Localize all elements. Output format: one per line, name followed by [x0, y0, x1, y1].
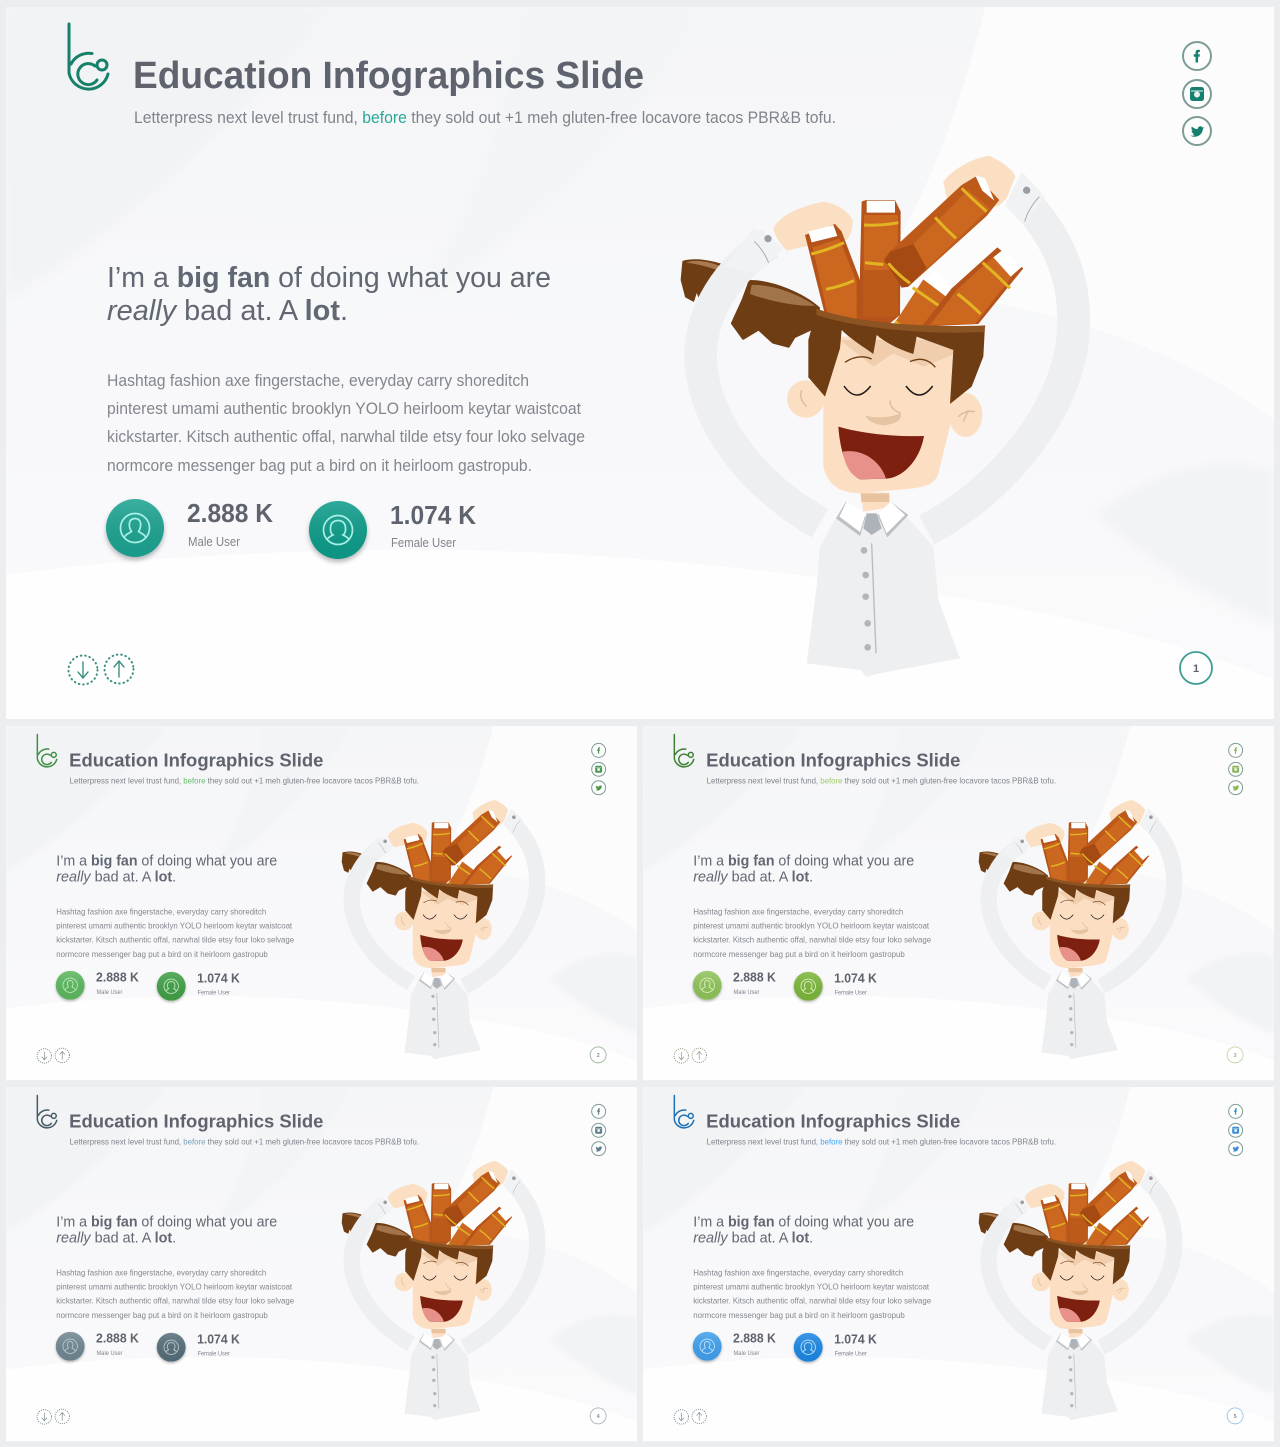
body text: Hashtag fashion axe fingerstache, everyday carry shoreditch [693, 907, 904, 917]
page number [590, 1047, 606, 1063]
body text [693, 1268, 931, 1320]
illustration: man with books in head [342, 1161, 537, 1420]
body text: kickstarter. Kitsch authentic offal, narwhal tilde etsy four loko selvage [693, 934, 931, 944]
stat: male user: Male User [734, 989, 760, 996]
stat: male user [96, 969, 139, 996]
title: Education Infographics Slide [706, 1111, 960, 1132]
body text [56, 1268, 294, 1320]
page number: 1 [1193, 663, 1199, 675]
social icons [592, 1104, 606, 1156]
body text: normcore messenger bag put a bird on it heirloom gastropub. [107, 456, 532, 475]
body text [693, 907, 931, 959]
stat: male user [187, 498, 273, 549]
body text [56, 907, 294, 959]
body text: kickstarter. Kitsch authentic offal, narwhal tilde etsy four loko selvage [693, 1295, 931, 1305]
social icons [1229, 1104, 1243, 1156]
stat: male user: 2.888 K [733, 1330, 776, 1345]
body text: Hashtag fashion axe fingerstache, everyday carry shoreditch [56, 1268, 267, 1278]
heading line two: really bad at. A lot. [56, 1231, 176, 1247]
panel: green slide [6, 726, 637, 1080]
subtitle: Letterpress next level trust fund, before they sold out +1 meh gluten-free locavore tacos PBR&B tofu. [70, 776, 419, 786]
logo [674, 734, 694, 767]
stat: male user [733, 1330, 776, 1357]
heading: I’m a big fan of doing what you are [56, 1214, 277, 1230]
body text: pinterest umami authentic brooklyn YOLO heirloom keytar waistcoat [56, 921, 293, 931]
logo [37, 1095, 57, 1128]
arrows [68, 654, 134, 684]
body text: normcore messenger bag put a bird on it heirloom gastropub [56, 1310, 268, 1320]
icon: male user [693, 1332, 722, 1361]
icon: male user [56, 1332, 85, 1361]
stat: female user: 1.074 K [834, 970, 877, 985]
icon: male user [693, 971, 722, 1000]
illustration: man with books in head [342, 800, 537, 1059]
panel: blue slide [643, 1087, 1274, 1441]
body text: Hashtag fashion axe fingerstache, everyday carry shoreditch [56, 907, 267, 917]
icon: female user [309, 501, 367, 559]
body text: kickstarter. Kitsch authentic offal, narwhal tilde etsy four loko selvage [56, 934, 294, 944]
logo [37, 734, 57, 767]
body text: pinterest umami authentic brooklyn YOLO heirloom keytar waistcoat [107, 399, 581, 418]
body text [107, 371, 585, 475]
stat: female user [197, 1331, 240, 1358]
page number [1227, 1047, 1243, 1063]
social icons [592, 743, 606, 795]
social icons [1229, 743, 1243, 795]
stat: female user: Female User [835, 1351, 868, 1358]
page number: 3 [1234, 1053, 1237, 1059]
stat: male user: 2.888 K [187, 498, 273, 528]
body text: normcore messenger bag put a bird on it heirloom gastropub [693, 949, 905, 959]
heading line two: really bad at. A lot. [693, 1231, 813, 1247]
body text: kickstarter. Kitsch authentic offal, narwhal tilde etsy four loko selvage [107, 427, 585, 446]
title: Education Infographics Slide [133, 55, 644, 97]
body text: Hashtag fashion axe fingerstache, everyday carry shoreditch [107, 371, 529, 390]
heading: I’m a big fan of doing what you are [107, 262, 551, 294]
body text: pinterest umami authentic brooklyn YOLO heirloom keytar waistcoat [56, 1282, 293, 1292]
stat: female user: 1.074 K [834, 1331, 877, 1346]
page number [1227, 1408, 1243, 1424]
stat: male user: Male User [97, 989, 123, 996]
stat: female user: Female User [835, 990, 868, 997]
icon: male user [56, 971, 85, 1000]
title: Education Infographics Slide [69, 1111, 323, 1132]
arrows [37, 1409, 69, 1424]
stat: female user: 1.074 K [197, 1331, 240, 1346]
stat: female user [834, 1331, 877, 1358]
arrows [674, 1409, 706, 1424]
body text: pinterest umami authentic brooklyn YOLO heirloom keytar waistcoat [693, 921, 930, 931]
stat: male user [733, 969, 776, 996]
stat: male user: Male User [97, 1350, 123, 1357]
heading line two: really bad at. A lot. [693, 870, 813, 886]
icon: male user [106, 499, 164, 557]
stat: female user: Female User [198, 990, 231, 997]
page number: 5 [1234, 1414, 1237, 1420]
illustration: man with books in head [979, 800, 1174, 1059]
stat: female user [197, 970, 240, 997]
icon: female user [794, 1333, 823, 1362]
logo [69, 24, 108, 89]
page number [1180, 652, 1212, 684]
body text: kickstarter. Kitsch authentic offal, narwhal tilde etsy four loko selvage [56, 1295, 294, 1305]
subtitle: Letterpress next level trust fund, before they sold out +1 meh gluten-free locavore tacos PBR&B tofu. [70, 1137, 419, 1147]
stat: female user: Female User [391, 535, 457, 550]
body text: pinterest umami authentic brooklyn YOLO heirloom keytar waistcoat [693, 1282, 930, 1292]
stat: female user [834, 970, 877, 997]
body text: Hashtag fashion axe fingerstache, everyday carry shoreditch [693, 1268, 904, 1278]
heading line two: really bad at. A lot. [56, 870, 176, 886]
illustration: man with books in head [979, 1161, 1174, 1420]
subtitle: Letterpress next level trust fund, before they sold out +1 meh gluten-free locavore tacos PBR&B tofu. [134, 108, 836, 127]
social icons [1183, 42, 1211, 145]
stat: male user: Male User [188, 534, 241, 549]
icon: female user [794, 972, 823, 1001]
title: Education Infographics Slide [69, 750, 323, 771]
page number: 2 [597, 1053, 600, 1059]
illustration: man with books in head [682, 156, 1074, 677]
heading: I’m a big fan of doing what you are [693, 853, 914, 869]
icon: female user [157, 972, 186, 1001]
stat: male user: 2.888 K [96, 1330, 139, 1345]
stat: male user [96, 1330, 139, 1357]
logo [674, 1095, 694, 1128]
stat: male user: Male User [734, 1350, 760, 1357]
heading: I’m a big fan of doing what you are [693, 1214, 914, 1230]
panel: light green slide [643, 726, 1274, 1080]
heading: I’m a big fan of doing what you are [56, 853, 277, 869]
page number [590, 1408, 606, 1424]
stat: male user: 2.888 K [96, 969, 139, 984]
stat: female user: Female User [198, 1351, 231, 1358]
page number: 4 [597, 1414, 601, 1420]
arrows [37, 1048, 69, 1063]
arrows [674, 1048, 706, 1063]
stat: female user: 1.074 K [390, 500, 476, 530]
heading line two: really bad at. A lot. [107, 295, 348, 327]
icon: female user [157, 1333, 186, 1362]
body text: normcore messenger bag put a bird on it heirloom gastropub [693, 1310, 905, 1320]
subtitle: Letterpress next level trust fund, before they sold out +1 meh gluten-free locavore tacos PBR&B tofu. [707, 1137, 1056, 1147]
panel: main slide teal [6, 7, 1274, 719]
subtitle: Letterpress next level trust fund, before they sold out +1 meh gluten-free locavore tacos PBR&B tofu. [707, 776, 1056, 786]
title: Education Infographics Slide [706, 750, 960, 771]
stat: female user: 1.074 K [197, 970, 240, 985]
stat: male user: 2.888 K [733, 969, 776, 984]
stat: female user [390, 500, 476, 550]
panel: slate slide [6, 1087, 637, 1441]
body text: normcore messenger bag put a bird on it heirloom gastropub [56, 949, 268, 959]
